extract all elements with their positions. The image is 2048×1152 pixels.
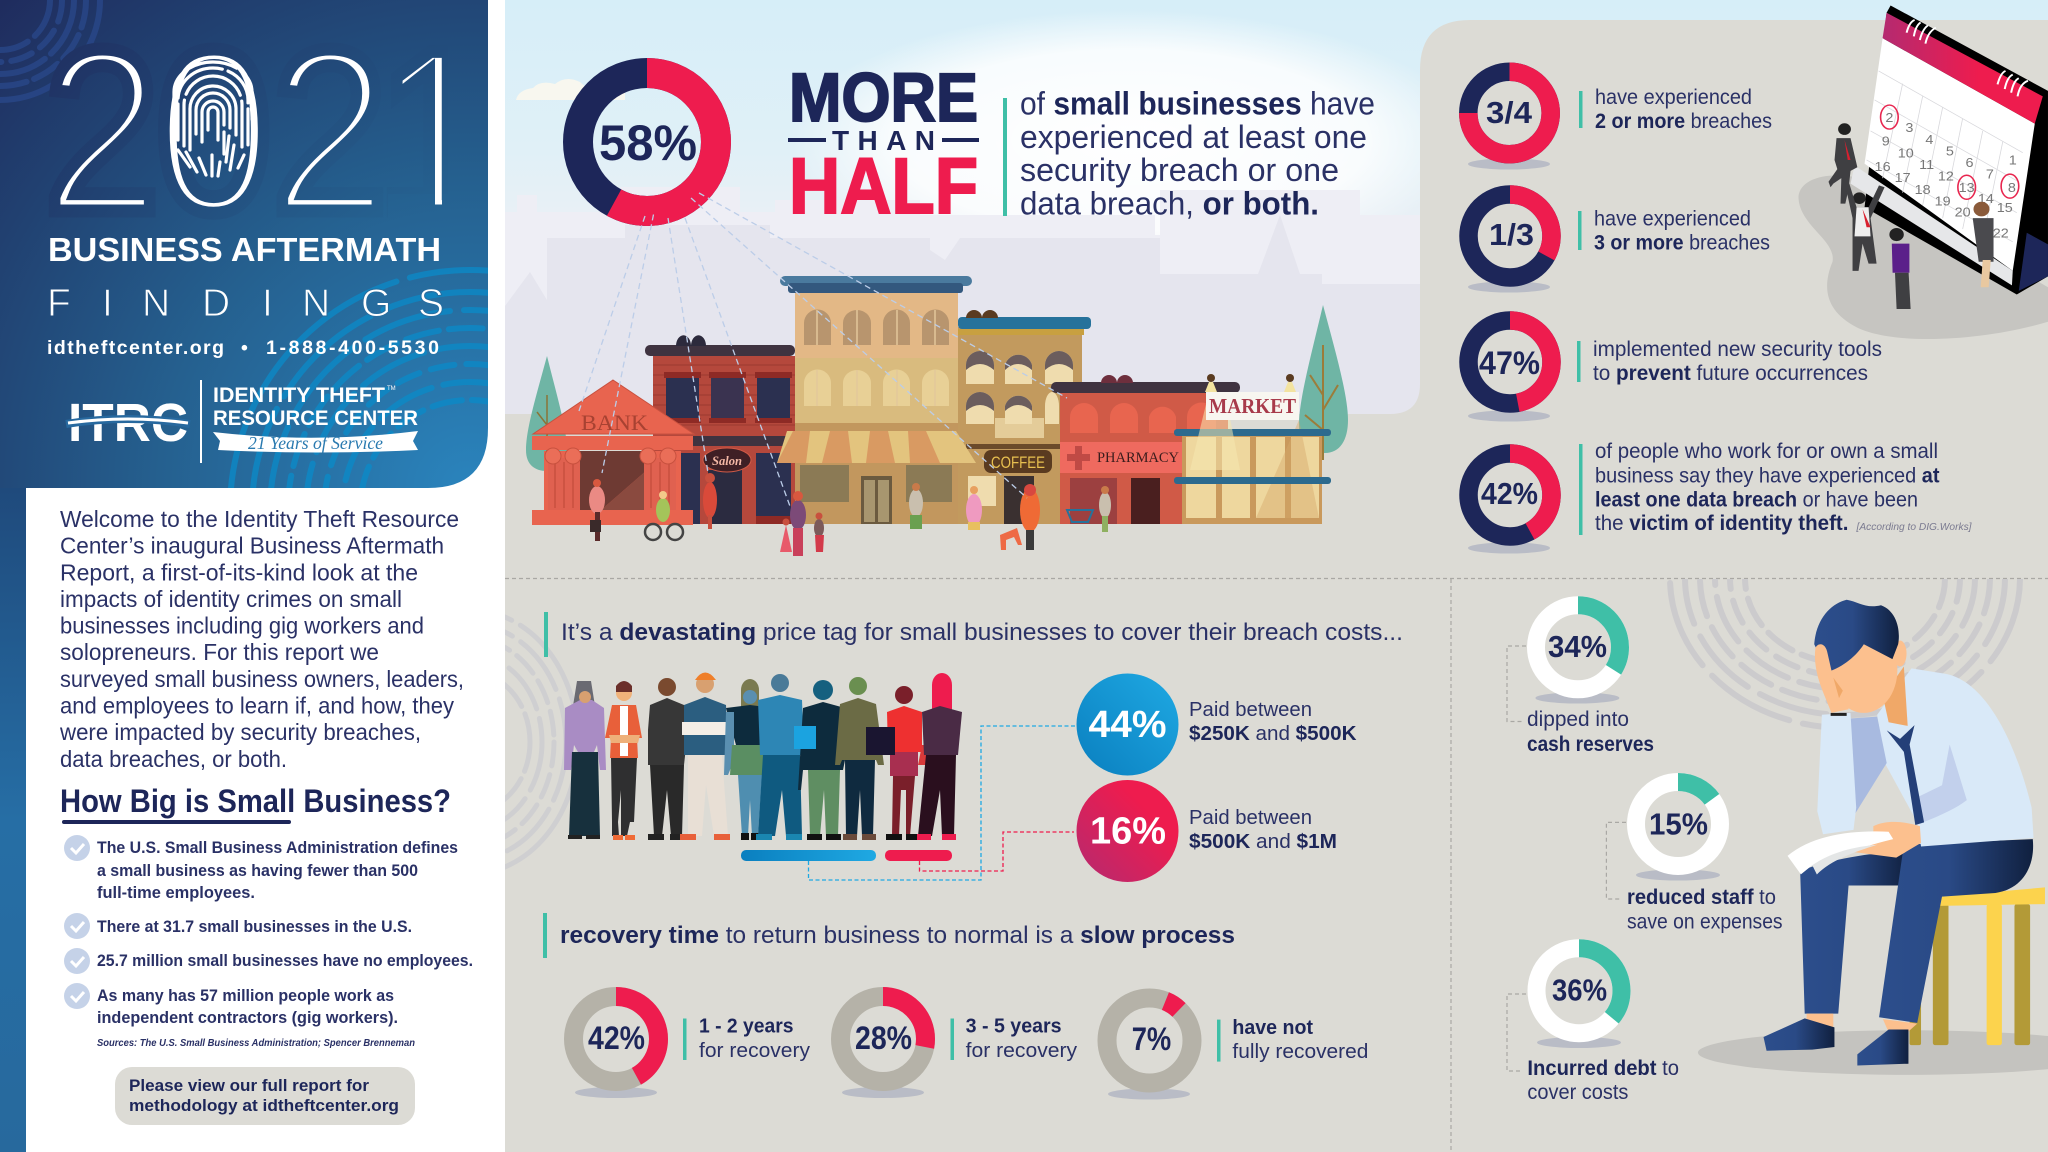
calendar dates: 17 bbox=[1895, 171, 1911, 185]
calendar dates: 11 bbox=[1919, 158, 1934, 172]
stat: 28% recovery: 28% bbox=[855, 1020, 912, 1056]
subtitle: findings: FINDINGS bbox=[47, 282, 444, 325]
intro paragraph: and employees to learn if, and how, they bbox=[60, 692, 454, 718]
stat row: 42%: the victim of identity theft. bbox=[1595, 512, 1848, 535]
calendar dates: 6 bbox=[1965, 156, 1974, 170]
stat: 36% incurred debt: 36% bbox=[1552, 973, 1607, 1008]
calendar dates: 3 bbox=[1905, 121, 1914, 135]
shirt bbox=[1817, 668, 2034, 847]
chart: 58% donut bbox=[578, 73, 716, 211]
stat: 44%: Paid between bbox=[1189, 699, 1312, 721]
decorative fingerprint right bbox=[1667, 579, 2023, 730]
logo: ITRC: TM bbox=[387, 386, 396, 392]
calendar dates: 19 bbox=[1935, 194, 1951, 208]
text: more than half description: data breach, or both. bbox=[1020, 186, 1319, 222]
calendar dates: 4 bbox=[1925, 133, 1934, 147]
tall tan building bbox=[777, 276, 976, 524]
woman in gray bbox=[1973, 202, 1994, 287]
market bbox=[1174, 374, 1331, 524]
brick building bbox=[645, 335, 795, 524]
contact line: 1-888-400-5530 bbox=[266, 337, 439, 359]
bullet list: a small business as having fewer than 500 bbox=[97, 862, 418, 880]
contact line: idtheftcenter.org bbox=[47, 337, 224, 359]
cloud bbox=[516, 79, 625, 100]
intro paragraph: Welcome to the Identity Theft Resource bbox=[60, 506, 459, 532]
legend bars bbox=[741, 850, 952, 861]
stat: 15% reduced staff: save on expenses bbox=[1627, 911, 1783, 934]
stat row: 3/4: have experienced bbox=[1595, 86, 1752, 109]
accent bar bbox=[543, 913, 547, 958]
text: more than half description bbox=[1020, 86, 1375, 222]
stat: 34% cash reserves: 34% bbox=[1548, 629, 1607, 664]
stat row: 1/3 bbox=[1468, 194, 1770, 292]
heading: It’s a devastating price tag for small businesses to cover their breach costs... bbox=[561, 619, 1403, 646]
heading: how big is small business: How Big is Small Business? bbox=[60, 783, 451, 819]
stat: 28% recovery: for recovery bbox=[966, 1040, 1077, 1062]
stat: 28% recovery: 3 - 5 years bbox=[966, 1015, 1062, 1037]
calendar dates: 18 bbox=[1915, 182, 1931, 197]
intro paragraph: Report, a first-of-its-kind look at the bbox=[60, 559, 418, 585]
chart: 58% donut: 58% bbox=[599, 115, 697, 171]
panel: blue title header bbox=[0, 0, 488, 1152]
stat: 36% incurred debt bbox=[1507, 948, 1679, 1104]
stat: 34% cash reserves: cash reserves bbox=[1527, 733, 1654, 756]
stat: 34% cash reserves: dipped into bbox=[1527, 708, 1629, 731]
panel: white intro bbox=[26, 488, 505, 1152]
stat: 42% recovery: 42% bbox=[588, 1020, 645, 1056]
bullet icons bbox=[64, 835, 90, 1009]
intro paragraph: Center’s inaugural Business Aftermath bbox=[60, 533, 444, 559]
stool bbox=[1910, 887, 2045, 1045]
contact line bbox=[47, 337, 439, 359]
stat row: 47% bbox=[1468, 320, 1882, 422]
stat row: 42% bbox=[1468, 440, 1973, 554]
connector lines bbox=[808, 726, 1076, 880]
tree left bbox=[526, 356, 567, 471]
intro paragraph: surveyed small business owners, leaders, bbox=[60, 666, 464, 692]
stat: 44%: 44% bbox=[1088, 704, 1166, 746]
tree right bbox=[1299, 305, 1348, 460]
stat: 16% bbox=[1076, 780, 1337, 882]
logo: ITRC: 21 Years of Service bbox=[248, 433, 383, 453]
head bbox=[1814, 600, 1908, 726]
man arms raised bbox=[1845, 184, 1885, 271]
accent bar bbox=[1003, 98, 1007, 216]
stat: 7% not recovered: fully recovered bbox=[1232, 1041, 1368, 1063]
fingerprint decoration bbox=[0, 0, 710, 750]
background: title glow bbox=[790, 10, 1470, 270]
stat: 44%: $250K and $500K bbox=[1189, 723, 1357, 745]
bullet list: independent contractors (gig workers). bbox=[97, 1009, 398, 1027]
calendar dates bbox=[1875, 110, 2017, 240]
logo: ITRC: RESOURCE CENTER bbox=[213, 406, 418, 430]
intro paragraph: were impacted by security breaches, bbox=[59, 719, 421, 745]
stat row: 47%: implemented new security tools bbox=[1593, 338, 1882, 361]
calendar dates: 14 bbox=[1978, 191, 1994, 206]
stat: 42% recovery: for recovery bbox=[699, 1040, 810, 1062]
heading: recovery time to return business to normal is a slow process bbox=[560, 922, 1235, 949]
hands and paper bbox=[1788, 822, 1921, 874]
calendar dates: 12 bbox=[1938, 169, 1954, 183]
illustration: street of small businesses bbox=[526, 276, 1348, 556]
brick building: Salon bbox=[712, 453, 742, 468]
calendar dates: 2 bbox=[1885, 110, 1893, 125]
text: more than half description: security breach or one bbox=[1020, 152, 1339, 188]
stat row: 1/3: have experienced bbox=[1594, 208, 1751, 230]
stat row: 42%: least one data breach or have been bbox=[1595, 488, 1918, 512]
stat: 42% recovery: 1 - 2 years bbox=[699, 1015, 794, 1037]
section: breach costs bbox=[544, 612, 1403, 882]
logo: ITRC bbox=[66, 380, 418, 463]
stat row: 1/3: 1/3 bbox=[1489, 217, 1534, 252]
stat: 36% incurred debt: Incurred debt to bbox=[1527, 1057, 1679, 1080]
shoes bbox=[1764, 1014, 1917, 1066]
stat: 16%: Paid between bbox=[1189, 807, 1312, 829]
stat row: 42%: business say they have experienced at bbox=[1595, 464, 1940, 488]
title: more than half: THAN bbox=[832, 125, 935, 156]
calendar dates: 9 bbox=[1882, 134, 1890, 148]
bullet list: There at 31.7 small businesses in the U.S. bbox=[97, 918, 412, 936]
intro paragraph bbox=[59, 506, 464, 772]
pharmacy: PHARMACY bbox=[1097, 450, 1179, 466]
subtitle: BUSINESS AFTERMATH bbox=[48, 231, 441, 268]
calendar dates: 1 bbox=[2009, 153, 2017, 168]
bank: BANK bbox=[581, 410, 648, 435]
stat: 42% recovery bbox=[574, 996, 810, 1098]
background: sky bbox=[505, 0, 2048, 430]
stat: 7% not recovered: have not bbox=[1232, 1017, 1313, 1039]
calendar dates: 20 bbox=[1955, 205, 1971, 220]
stat row: 3/4 bbox=[1468, 72, 1772, 170]
calendar dates: 16 bbox=[1875, 159, 1891, 174]
stat row: 42%: of people who work for or own a small bbox=[1595, 440, 1938, 463]
coffee building: COFFEE bbox=[991, 453, 1045, 472]
stat row: 3/4: 2 or more breaches bbox=[1595, 110, 1772, 133]
text: more than half description: of small businesses have bbox=[1020, 86, 1375, 122]
stat row: 47%: 47% bbox=[1479, 345, 1540, 381]
stat: 28% recovery bbox=[840, 996, 1077, 1098]
title: more than half bbox=[788, 59, 979, 230]
contact line: • bbox=[241, 337, 248, 359]
illustration: stressed man on stool bbox=[1698, 600, 2048, 1075]
tie bbox=[1887, 725, 1924, 825]
callout: full report: methodology at idtheftcenter.org bbox=[129, 1096, 399, 1115]
calendar dates: 5 bbox=[1946, 144, 1954, 158]
market: MARKET bbox=[1209, 394, 1296, 418]
intro paragraph: solopreneurs. For this report we bbox=[60, 639, 379, 665]
callout: full report bbox=[115, 1067, 415, 1125]
skyline silhouette bbox=[505, 187, 1420, 420]
bank bbox=[532, 380, 694, 525]
bullet list: full-time employees. bbox=[97, 884, 255, 902]
illustration: ten workers bbox=[564, 672, 962, 840]
sources: Sources: The U.S. Small Business Administration; Spencer Brenneman bbox=[97, 1038, 415, 1049]
stat row: 1/3: 3 or more breaches bbox=[1594, 232, 1770, 254]
stat: 44% bbox=[1076, 674, 1357, 776]
trousers bbox=[1800, 839, 2033, 1023]
ground and right panel bbox=[505, 20, 2048, 1152]
bullet list: 25.7 million small businesses have no employees. bbox=[97, 952, 473, 970]
stat row: 42%: [According to DIG.Works] bbox=[1856, 521, 1973, 533]
callout: full report: Please view our full report for bbox=[129, 1076, 369, 1095]
calendar dates: 15 bbox=[1997, 201, 2013, 215]
title: more than half: MORE bbox=[789, 59, 978, 136]
stat: 15% reduced staff bbox=[1606, 782, 1783, 934]
text: more than half description: experienced at least one bbox=[1020, 119, 1367, 155]
man pointing bbox=[1829, 123, 1857, 204]
intro paragraph: impacts of identity crimes on small bbox=[60, 586, 402, 612]
accent bar bbox=[544, 612, 548, 657]
stat row: 42%: 42% bbox=[1481, 476, 1538, 511]
section: recovery time bbox=[543, 913, 1368, 1100]
stat: 15% reduced staff: 15% bbox=[1649, 807, 1708, 842]
woman in purple bbox=[1889, 228, 1911, 309]
calendar dates: 8 bbox=[2008, 181, 2016, 195]
stat: 7% not recovered: 7% bbox=[1132, 1021, 1171, 1057]
calendar dates: 22 bbox=[1993, 226, 2009, 240]
decorative fingerprint left bbox=[505, 614, 578, 870]
stat: 15% reduced staff: reduced staff to bbox=[1627, 886, 1776, 909]
year 2021: 2021 bbox=[44, 1, 493, 260]
dashed lines from donut to storefronts bbox=[579, 193, 1067, 509]
logo: ITRC: ITRC bbox=[68, 393, 188, 453]
icon: fingerprint bbox=[174, 62, 252, 176]
title: more than half: HALF bbox=[789, 141, 978, 230]
illustration: people and giant calendar bbox=[1798, 5, 2048, 339]
pharmacy bbox=[1051, 375, 1240, 524]
coffee building bbox=[958, 310, 1091, 524]
stat row: 47%: to prevent future occurrences bbox=[1593, 362, 1868, 385]
stat: 16%: 16% bbox=[1090, 810, 1166, 852]
stat: 16%: $500K and $1M bbox=[1189, 831, 1337, 853]
calendar dates: 13 bbox=[1959, 181, 1975, 195]
intro paragraph: businesses including gig workers and bbox=[60, 613, 424, 639]
stat: 34% cash reserves bbox=[1507, 605, 1654, 756]
calendar dates: 10 bbox=[1898, 146, 1914, 160]
intro paragraph: data breaches, or both. bbox=[60, 746, 287, 772]
pedestrians bbox=[589, 473, 1111, 556]
bullet list bbox=[97, 839, 473, 1027]
dashed dividers bbox=[505, 578, 2048, 1152]
calendar dates: 7 bbox=[1986, 167, 1994, 181]
stat: 7% not recovered bbox=[1094, 985, 1368, 1100]
bullet list: As many has 57 million people work as bbox=[97, 987, 394, 1005]
stat row: 3/4: 3/4 bbox=[1486, 95, 1533, 130]
bullet list: The U.S. Small Business Administration defines bbox=[97, 839, 458, 857]
stat: 36% incurred debt: cover costs bbox=[1527, 1081, 1628, 1104]
logo: ITRC: IDENTITY THEFT bbox=[213, 383, 385, 407]
